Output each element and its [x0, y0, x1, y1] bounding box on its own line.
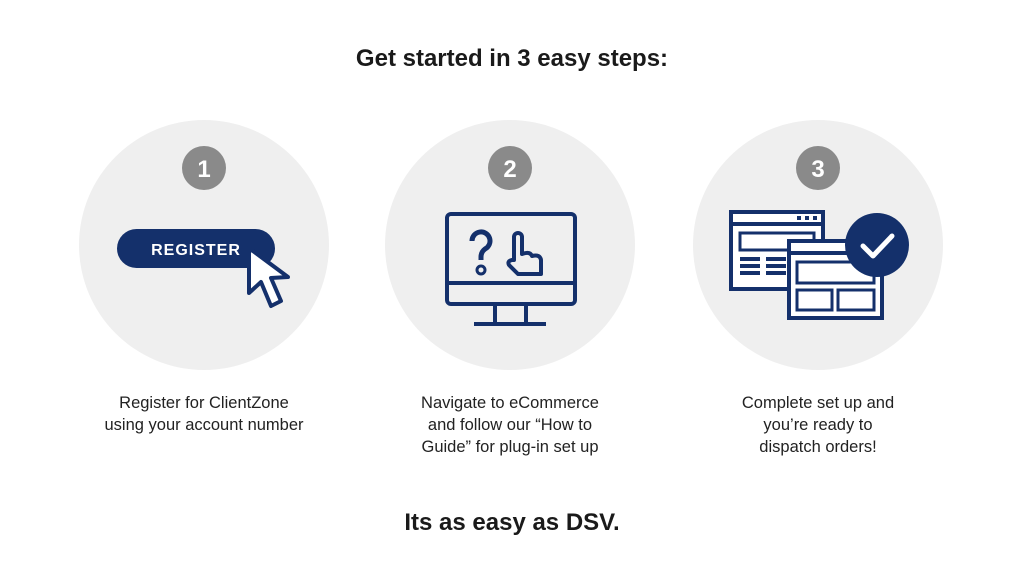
caption 1: using your account number	[104, 416, 304, 434]
step 1 icon	[79, 120, 329, 370]
step 2 icon: 2	[503, 156, 517, 183]
step 2 icon	[385, 120, 635, 370]
caption 1	[104, 394, 304, 434]
step 1 icon: REGISTER	[151, 242, 241, 259]
caption 2: Guide” for plug-in set up	[421, 438, 598, 456]
step 3 icon	[693, 120, 943, 370]
step 1 icon: 1	[197, 156, 211, 183]
caption 3: dispatch orders!	[759, 438, 877, 456]
step 3 icon: 3	[811, 156, 825, 183]
caption 3: Complete set up and	[742, 394, 894, 412]
caption 3	[742, 394, 894, 456]
caption 2: Navigate to eCommerce	[421, 394, 599, 412]
caption 3: you’re ready to	[763, 416, 873, 434]
title: Get started in 3 easy steps:	[356, 45, 668, 72]
caption 2	[421, 394, 599, 456]
caption 1: Register for ClientZone	[119, 394, 289, 412]
caption 2: and follow our “How to	[428, 416, 592, 434]
footer: Its as easy as DSV.	[404, 509, 620, 536]
